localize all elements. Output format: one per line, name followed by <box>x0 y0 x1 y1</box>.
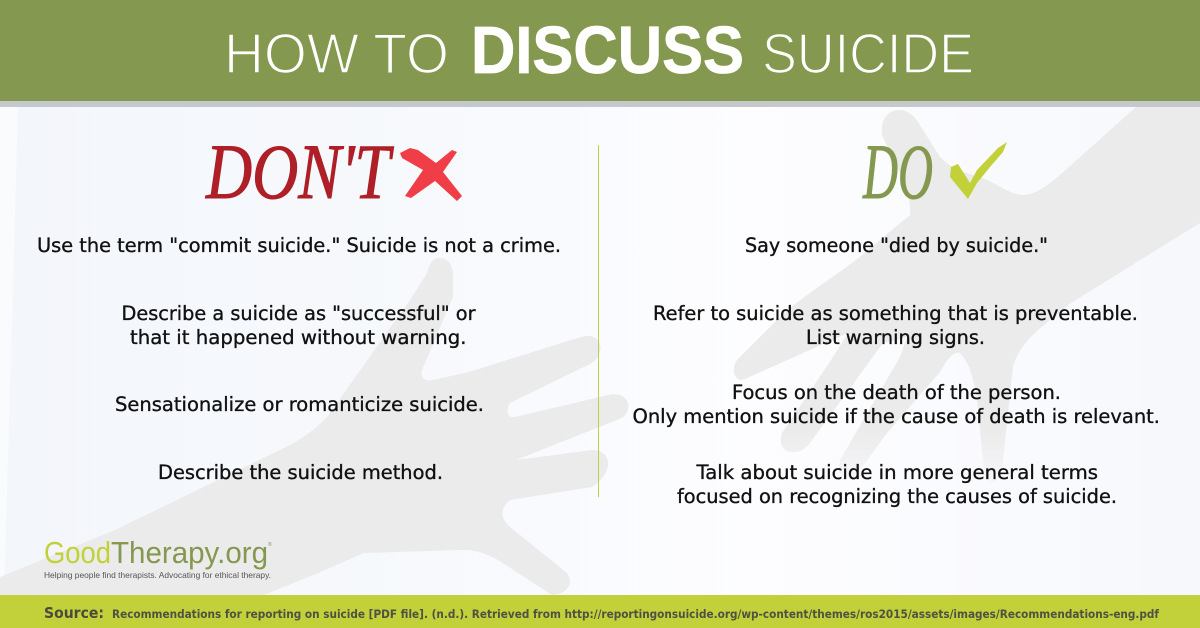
list: don't items: Describe the suicide method. <box>158 461 443 484</box>
footer source bar <box>0 595 1200 628</box>
list: do items: focused on recognizing the causes of suicide. <box>677 485 1117 508</box>
icon: red cross <box>400 148 462 201</box>
logo: ® <box>268 541 272 548</box>
list: do items: Talk about suicide in more general terms <box>695 461 1098 484</box>
list: do items: List warning signs. <box>806 326 985 349</box>
list: don't items <box>37 234 561 484</box>
heading: don't: DON'T <box>205 128 394 215</box>
list: do items: Refer to suicide as something that is preventable. <box>653 302 1138 325</box>
list: don't items: that it happened without warning. <box>130 326 466 349</box>
list: do items: Say someone "died by suicide." <box>745 234 1048 257</box>
logo <box>44 535 272 580</box>
source label: Source: <box>44 604 104 622</box>
logo: Therapy.org <box>111 535 268 570</box>
panel: don't <box>37 128 561 484</box>
list: don't items: Sensationalize or romanticize suicide. <box>115 393 484 416</box>
title <box>224 13 974 88</box>
icon: green check <box>950 142 1007 199</box>
logo: Helping people find therapists. Advocating for ethical therapy. <box>44 570 271 580</box>
divider <box>598 145 599 497</box>
title: SUICIDE <box>762 22 974 86</box>
title: HOW TO <box>224 22 449 86</box>
list: do items: Only mention suicide if the cause of death is relevant. <box>632 405 1160 428</box>
title: DISCUSS <box>471 13 744 88</box>
logo: Good <box>44 535 111 570</box>
header banner <box>0 0 1200 107</box>
list: don't items: Describe a suicide as "successful" or <box>122 302 476 325</box>
list: do items <box>632 234 1160 508</box>
background hand: left <box>0 258 628 595</box>
heading: do: DO <box>862 128 933 215</box>
list: do items: Focus on the death of the person. <box>732 381 1061 404</box>
background <box>0 100 1200 600</box>
list: don't items: Use the term "commit suicide." Suicide is not a crime. <box>37 234 561 257</box>
background hand: right <box>734 107 1200 482</box>
panel: do <box>632 128 1160 508</box>
